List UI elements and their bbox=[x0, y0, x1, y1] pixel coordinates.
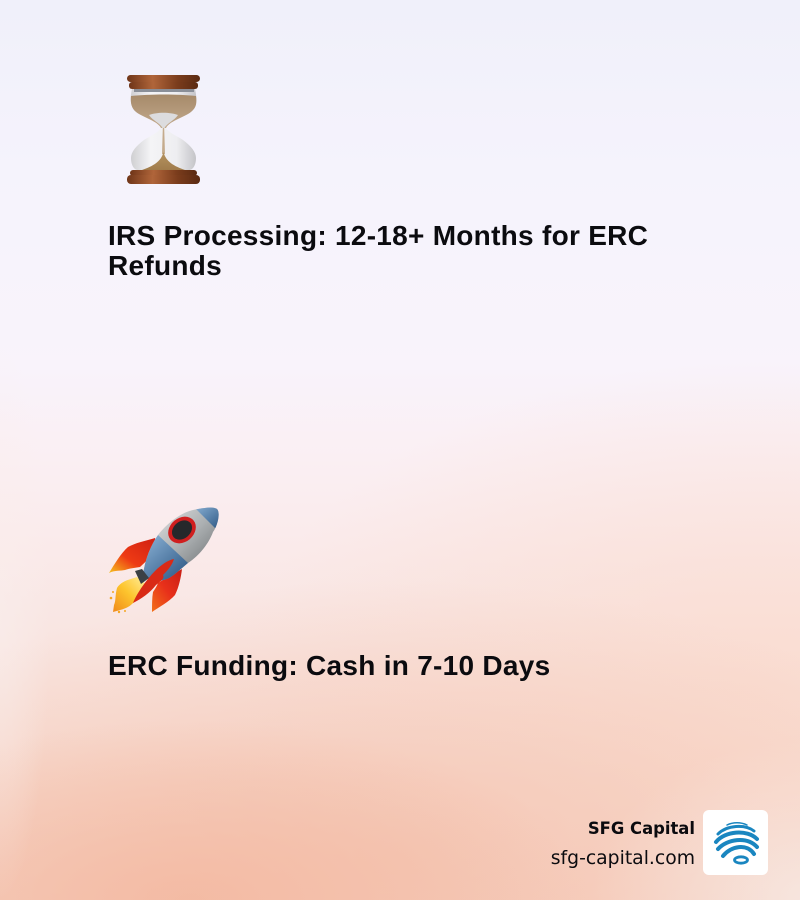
icon: hourglass bbox=[127, 75, 200, 184]
brand: SFG Capital bbox=[551, 810, 768, 875]
brand url: sfg-capital.com bbox=[551, 848, 695, 869]
logo bbox=[703, 810, 768, 875]
heading: IRS processing bbox=[108, 220, 648, 281]
heading: ERC funding: ERC Funding: Cash in 7-10 Days bbox=[108, 650, 550, 681]
flame bbox=[110, 577, 147, 613]
heading: IRS processing: IRS Processing: 12-18+ Months for ERC bbox=[108, 220, 648, 251]
heading: IRS processing: Refunds bbox=[108, 250, 222, 281]
icon: rocket bbox=[109, 508, 219, 614]
brand name: SFG Capital bbox=[588, 819, 695, 838]
